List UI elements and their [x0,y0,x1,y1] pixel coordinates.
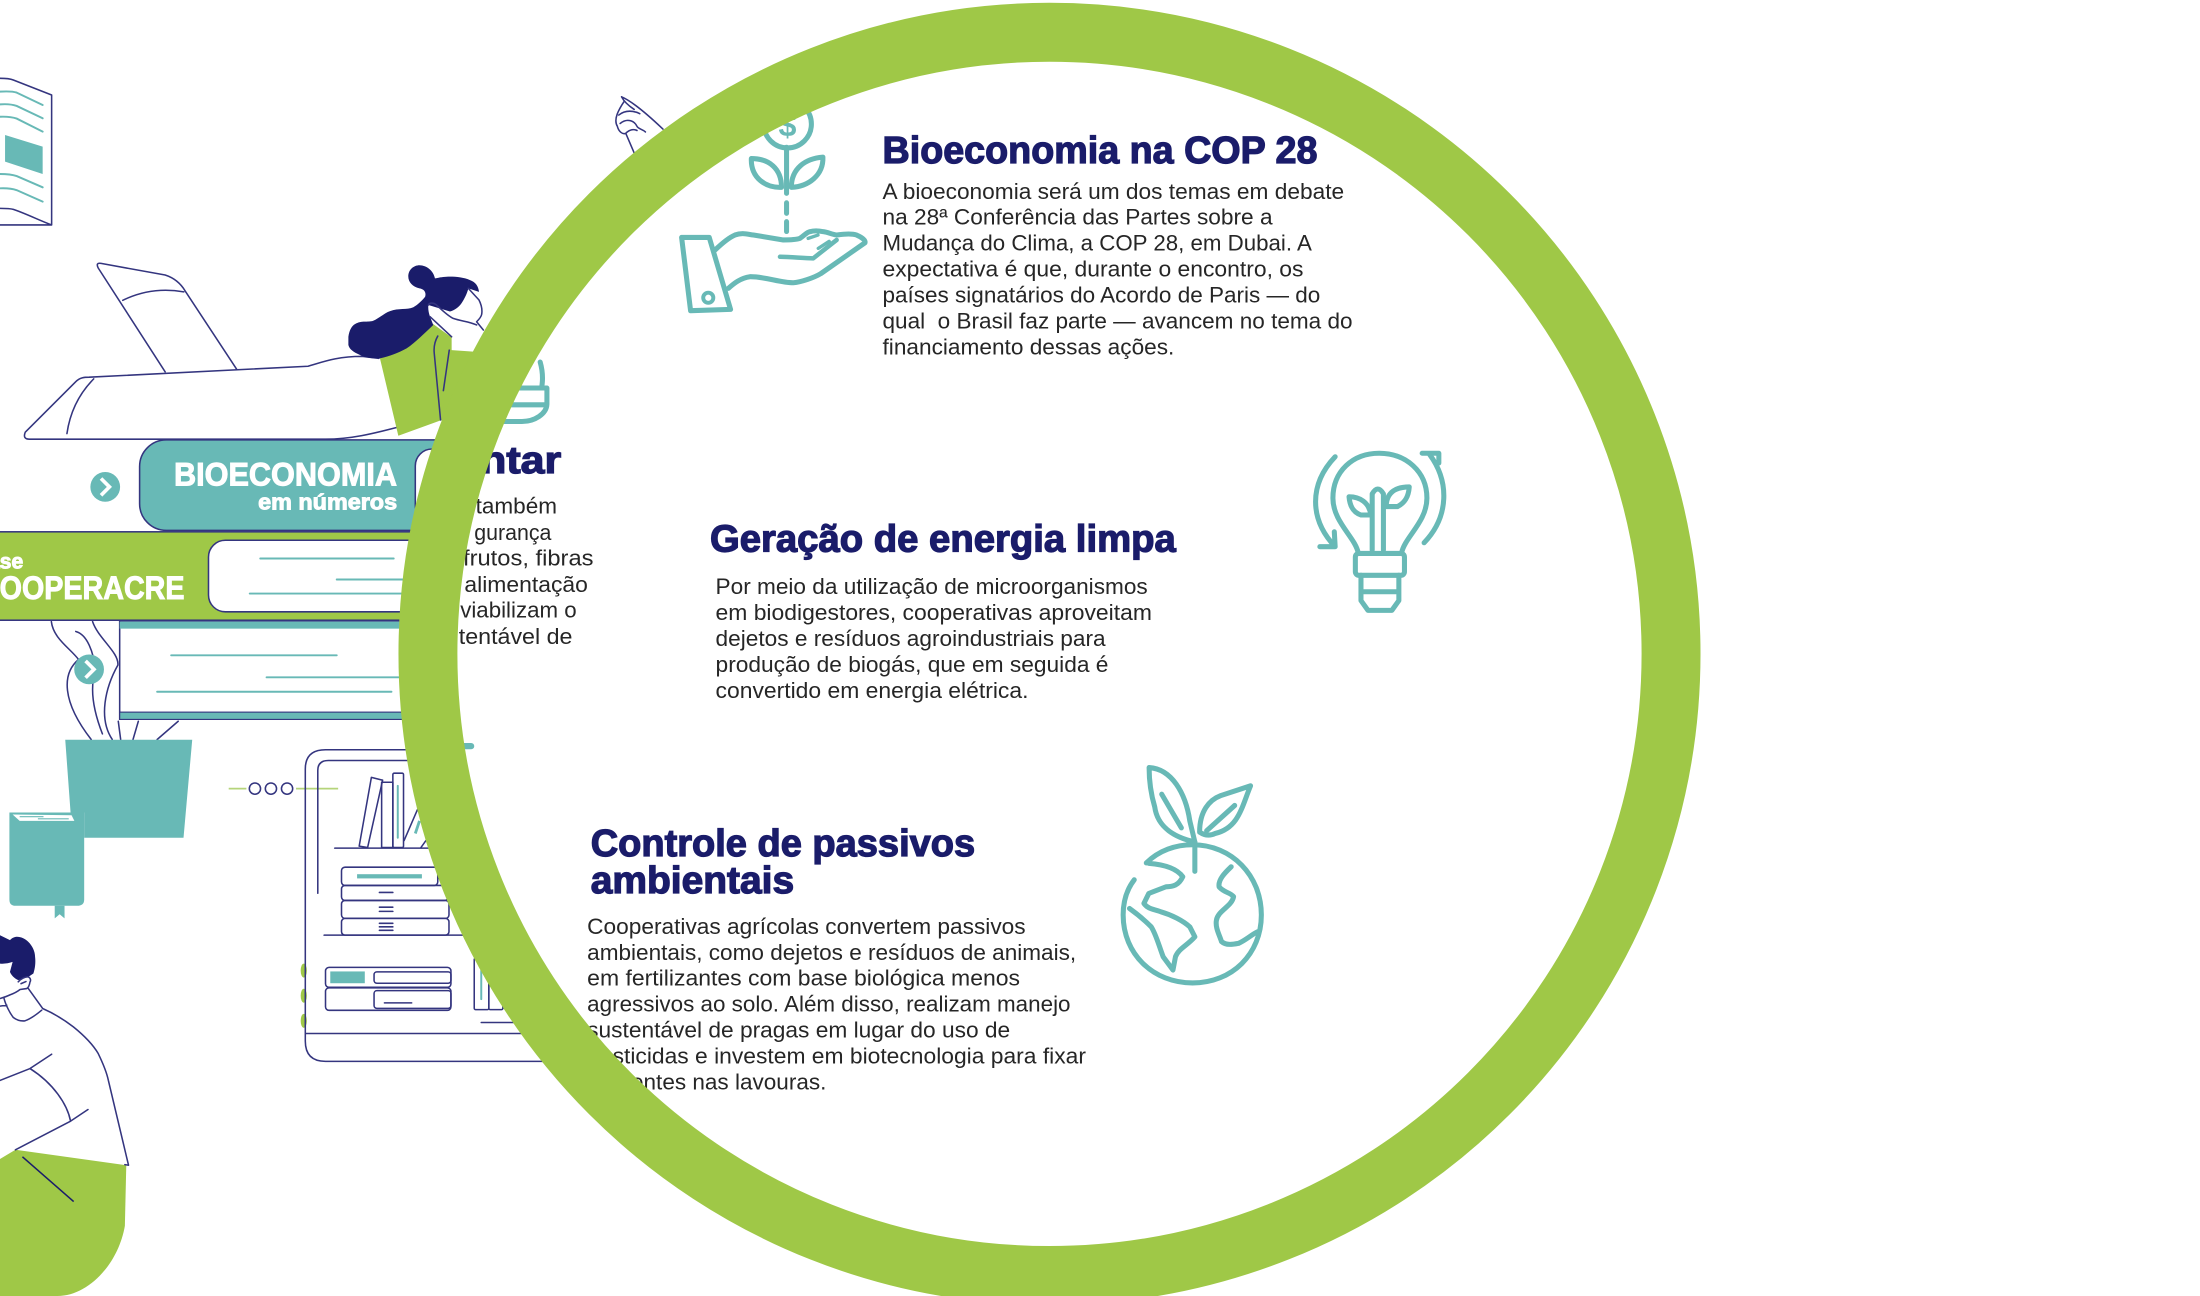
text: Controle de passivos ambientais body: Cooperativas agrícolas convertem passivos [587,914,1026,939]
text: Controle de passivos ambientais body: em fertilizantes com base biológica menos [587,966,1020,991]
icon: arrow button 2 [74,654,104,684]
icon: arrow button 1 [90,472,120,502]
text: alimentar body (partially hidden): também [476,494,557,519]
text: alimentar body (partially hidden): alimentação [464,572,588,597]
heading: Controle de passivos ambientais: Controle de passivos [591,823,975,865]
illustration: pointing hand [616,97,663,153]
illustration: open magazine [0,78,52,225]
text: Bioeconomia na COP 28 body: financiamento dessas ações. [883,334,1174,359]
icon: light bulb with sprout [1316,453,1444,610]
text: Bioeconomia na COP 28 body: Mudança do Clima, a COP 28, em Dubai. A [883,230,1312,255]
text: Controle de passivos ambientais body [587,914,1086,1095]
illustration: bookshelf tablet [301,750,603,1061]
text: Bioeconomia na COP 28 body: países signatários do Acordo de Paris — do [883,282,1320,307]
text: Bioeconomia na COP 28 body: qual o Brasil faz parte — avancem no tema do [883,308,1353,333]
text: alimentar body (partially hidden): tentável de [459,624,572,649]
pagination dots [229,783,338,794]
text: Geração de energia limpa body: Por meio da utilização de microorganismos [716,574,1148,599]
text: Controle de passivos ambientais body: nutrientes nas lavouras. [587,1070,826,1095]
book spine: Bioeconomia em números [140,440,542,530]
icon: bowl (partially hidden) [504,360,550,424]
text: Bioeconomia na COP 28 body: A bioeconomia será um dos temas em debate [883,179,1344,204]
text: Controle de passivos ambientais body: ambientais, como dejetos e resíduos de animais, [587,940,1076,965]
text: Bioeconomia na COP 28 body [883,179,1353,359]
heading: Bioeconomia na COP 28: Bioeconomia na COP 28 [883,130,1317,172]
book spine: Cooperacre [0,532,533,620]
illustration: woman reading on laptop [24,263,491,439]
icon: hand with sprouting coin: $ [779,107,797,143]
heading: Controle de passivos ambientais: ambientais [591,860,794,902]
text: Geração de energia limpa body: dejetos e resíduos agroindustriais para [716,626,1106,651]
heading: alimentar (partially hidden): mentar [418,440,562,482]
green ring [428,32,1671,1276]
text: alimentar body (partially hidden): gurança [474,520,552,545]
text: alimentar body (partially hidden): viabilizam o [460,597,577,622]
book spine: third book [120,621,527,719]
illustration: small teal book [9,812,84,918]
text: Controle de passivos ambientais body: pesticidas e investem em biotecnologia para fixar [587,1044,1086,1069]
text: Controle de passivos ambientais body: agressivos ao solo. Além disso, realizam manejo [587,992,1071,1017]
book spine: Bioeconomia em números: em números [258,489,397,514]
illustration: potted plant [51,622,192,838]
icon: globe with sprout [1123,768,1261,983]
text: alimentar body (partially hidden) [459,494,594,649]
teal mark peeking past the ring [464,743,474,750]
text: Geração de energia limpa body: produção de biogás, que em seguida é [716,652,1108,677]
text: Geração de energia limpa body: em biodigestores, cooperativas aproveitam [716,600,1152,625]
text: Controle de passivos ambientais body: sustentável de pragas em lugar do uso de [587,1018,1010,1043]
heading: Controle de passivos ambientais [591,828,974,894]
text: Bioeconomia na COP 28 body: expectativa é que, durante o encontro, os [883,256,1304,281]
book spine: Bioeconomia em números: BIOECONOMIA [174,457,397,493]
text: Geração de energia limpa body: convertido em energia elétrica. [716,678,1028,703]
icon: hand with sprouting coin [682,100,865,311]
panel: contents inside the ring [418,100,1444,1095]
text: alimentar body (partially hidden): frutos, fibras [463,545,594,570]
text: Bioeconomia na COP 28 body: na 28ª Conferência das Partes sobre a [883,205,1273,230]
heading: Geração de energia limpa: Geração de energia limpa [710,518,1177,560]
text: Geração de energia limpa body [716,574,1152,703]
white disc inside ring [428,32,1671,1276]
illustration: seated man [0,935,129,1296]
